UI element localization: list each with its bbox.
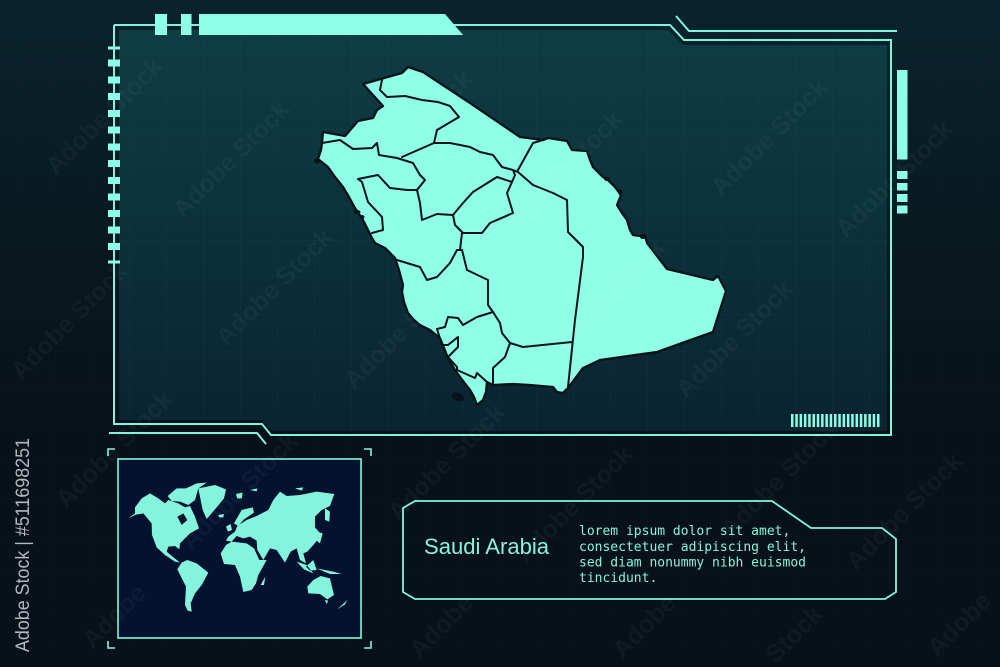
description text: consectetuer adipiscing elit, [579, 540, 806, 555]
top right accent line [676, 16, 897, 31]
right side gauge [897, 70, 908, 214]
world map [128, 483, 347, 612]
Australia [307, 576, 334, 599]
South America [177, 560, 208, 612]
watermarks: Adobe Stock [670, 275, 798, 403]
watermarks: Adobe Stock [338, 266, 466, 394]
North America [128, 493, 199, 563]
Greenland [198, 485, 226, 519]
watermarks: Adobe Stock [705, 73, 833, 201]
small islands [218, 487, 347, 609]
watermarks: Adobe Stock [5, 257, 133, 385]
watermarks: Adobe Stock [50, 385, 178, 513]
map: Saudi Arabia regions [314, 67, 726, 405]
Africa [221, 542, 267, 592]
watermarks: Adobe [404, 589, 479, 664]
watermarks: Adobe [922, 587, 997, 662]
stock id vertical caption: Adobe Stock | #511698251 [13, 438, 34, 652]
barcode ticks [791, 414, 880, 427]
bottom left accent line [109, 433, 266, 444]
panel frame line [114, 25, 891, 435]
watermarks: Adobe Stock [210, 223, 338, 351]
watermarks: Adobe Stock [840, 447, 968, 575]
description text: sed diam nonummy nibh euismod [579, 556, 806, 570]
info box [403, 501, 896, 599]
top header blocks [155, 14, 463, 35]
Eurasia [226, 492, 334, 563]
watermarks: Adobe Stock [510, 440, 638, 568]
Arctic islands [168, 483, 207, 505]
watermarks: Adobe Stock [715, 415, 843, 543]
left tick marks [108, 46, 120, 264]
watermarks: Adobe Stock [382, 398, 510, 526]
offshore islands [314, 158, 646, 403]
map silhouette [318, 67, 726, 405]
internal region borders [322, 80, 583, 387]
world map box [118, 459, 361, 638]
watermarks: Adobe [77, 579, 152, 654]
watermarks: Adobe [607, 589, 682, 664]
Scandinavia [234, 507, 254, 526]
watermarks: Adobe Stock [542, 233, 670, 361]
world map corner brackets [108, 449, 371, 648]
country name: Saudi Arabia [424, 534, 550, 559]
description text: tincidunt. [579, 571, 657, 586]
watermarks: Adobe Stock [830, 115, 958, 243]
watermarks: Adobe Stock [167, 95, 295, 223]
watermarks: Adobe Stock [175, 427, 303, 555]
watermarks: Adobe Stock [500, 105, 628, 233]
main map panel [119, 30, 887, 431]
watermarks: Stock [760, 600, 828, 667]
watermarks: Adobe Stock [40, 52, 168, 180]
description text: lorem ipsum dolor sit amet, [579, 524, 790, 539]
watermarks: Stock [410, 65, 478, 133]
